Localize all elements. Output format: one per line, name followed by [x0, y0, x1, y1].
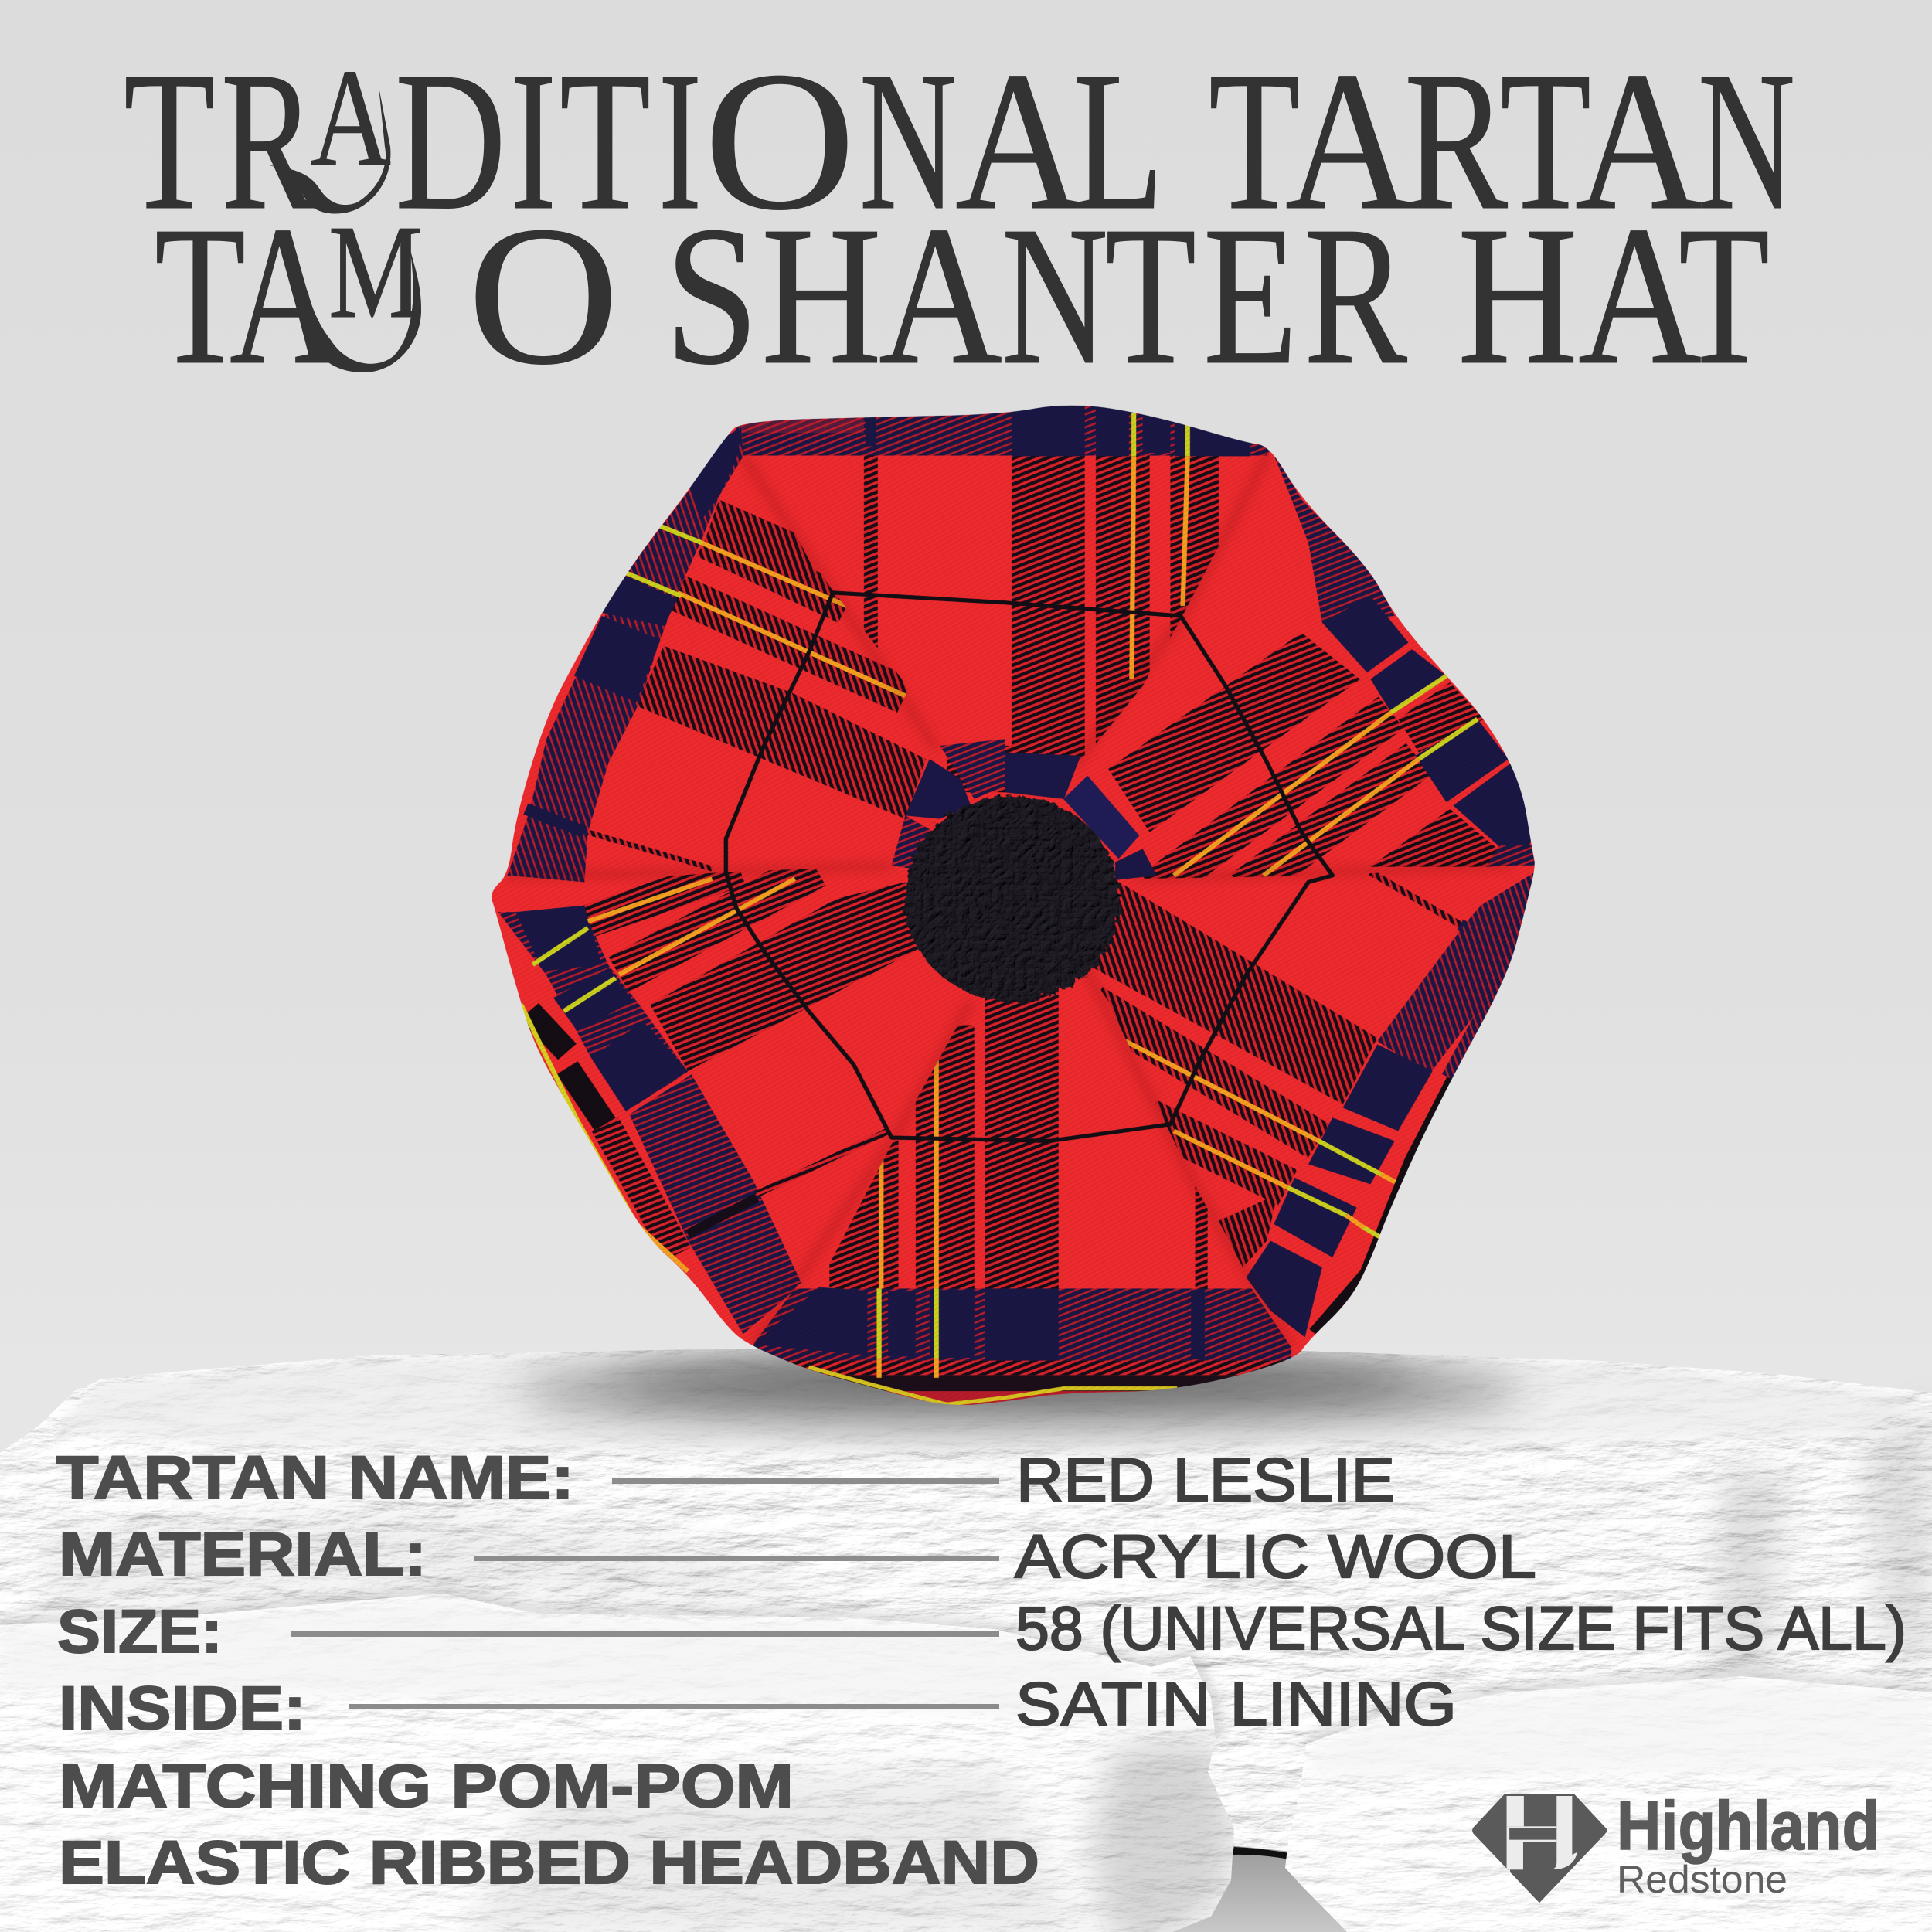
title line 1: T	[124, 30, 215, 251]
panel: specifications	[56, 1443, 1906, 1896]
slab face shading	[46, 1399, 1932, 1685]
title line 2: M	[328, 197, 423, 346]
connector line: inside	[349, 1704, 999, 1709]
value: acrylic wool: ACRYLIC WOOL	[1015, 1522, 1536, 1590]
lower right rock	[1285, 1676, 1932, 1932]
panel: upper right wedge	[1108, 446, 1540, 890]
title line 1: L	[1073, 30, 1164, 251]
title line 1: A	[955, 30, 1083, 251]
title line 1: A	[311, 41, 391, 196]
lower right rock top surface	[1310, 1679, 1932, 1777]
title line 1: O	[704, 30, 855, 251]
title line 2: T	[1679, 185, 1770, 406]
hat shadow on rock	[518, 1355, 1522, 1427]
title line 2: O	[468, 185, 619, 406]
title line 1: A	[1285, 30, 1413, 251]
title line 2: T	[1105, 185, 1196, 406]
title line 1: N	[859, 30, 957, 251]
black hexagon stitch line	[726, 593, 1332, 1141]
label: size: SIZE:	[57, 1597, 223, 1665]
label: material: MATERIAL:	[59, 1519, 427, 1588]
title line 1: I	[510, 30, 556, 251]
pom-pom	[903, 794, 1118, 999]
title line 1: N	[1698, 30, 1795, 251]
logo: Highland Redstone	[1472, 1787, 1879, 1903]
main rock slab	[0, 1349, 1932, 1932]
title line 2: R	[1304, 185, 1408, 406]
title line 1: I	[658, 30, 702, 251]
slab top surface	[54, 1351, 1917, 1451]
title line 1: R	[221, 30, 316, 251]
value: size: 58 (UNIVERSAL SIZE FITS ALL)	[1015, 1594, 1906, 1662]
title line 1: T	[560, 30, 651, 251]
icon: diamond monogram	[1472, 1794, 1607, 1903]
floor gap between rocks	[1159, 1845, 1360, 1932]
navy centre blocks	[892, 739, 1157, 880]
label: inside: INSIDE:	[59, 1673, 306, 1742]
title line 2: A	[230, 185, 338, 406]
title line 1: D	[395, 30, 506, 251]
panel: top wedge	[726, 400, 1278, 792]
title swash flourishes	[264, 87, 421, 372]
title line 2: E	[1203, 185, 1298, 406]
panel: lower right wedge	[1087, 869, 1540, 1337]
title line 2: A	[1578, 185, 1702, 406]
title line 2: H	[761, 185, 882, 406]
value: red leslie: RED LESLIE	[1016, 1445, 1395, 1514]
panel: upper left wedge	[505, 420, 926, 882]
lower left rock top surface	[0, 1597, 1159, 1723]
hat	[464, 386, 1568, 1424]
logo subtitle: Redstone	[1617, 1858, 1787, 1901]
fabric twill overlay	[464, 386, 1568, 1424]
label: tartan name: TARTAN NAME:	[56, 1443, 574, 1512]
lower left rock	[0, 1594, 1234, 1932]
title line 2: N	[1002, 185, 1108, 406]
title line 2: S	[665, 185, 759, 406]
title	[124, 30, 1795, 406]
value: satin lining: SATIN LINING	[1015, 1669, 1457, 1738]
title line 2: A	[879, 185, 1002, 406]
panel: white rock pedestal	[0, 1349, 1932, 1932]
panel: bottom wedge	[740, 972, 1305, 1411]
connector line: size	[291, 1631, 999, 1637]
title line 2: H	[1458, 185, 1578, 406]
connector line: material	[474, 1556, 999, 1561]
title line 1: R	[1404, 30, 1509, 251]
hat red base	[492, 407, 1535, 1378]
feature: matching pom-pom: MATCHING POM-POM	[59, 1751, 794, 1820]
title line 1: T	[1500, 30, 1591, 251]
title line 1: A	[1575, 30, 1702, 251]
seam shadows	[509, 450, 1512, 1347]
feature: elastic ribbed headband: ELASTIC RIBBED HEADBAND	[59, 1828, 1039, 1896]
connector line: tartan name	[612, 1478, 999, 1484]
title line 1: T	[1209, 30, 1300, 251]
panel: lower left wedge	[498, 868, 919, 1334]
lower left rock shading	[464, 1739, 1236, 1932]
shadow behind lower rocks	[0, 1594, 1932, 1744]
logo wordmark: Highland	[1617, 1787, 1879, 1864]
title line 2: T	[155, 185, 246, 406]
